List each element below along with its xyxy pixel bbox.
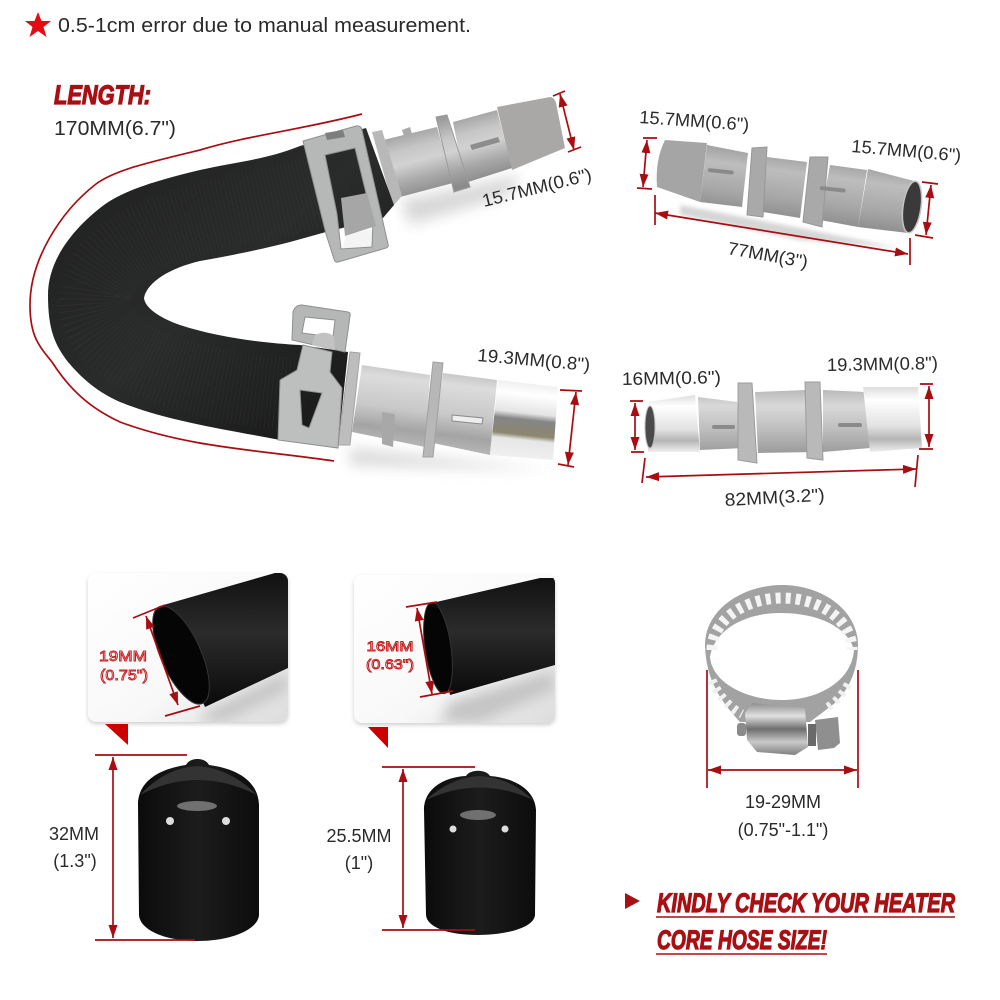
heading: length: LENGTH:	[54, 80, 151, 110]
label: 32mm: 32MM	[49, 824, 99, 844]
dimension: bottom end	[558, 390, 582, 467]
dimension: 82mm connector	[630, 384, 933, 487]
shadow	[680, 205, 900, 248]
hose assembly	[48, 97, 565, 470]
opening	[899, 180, 925, 234]
label: left end size: 15.7MM(0.6")	[639, 107, 750, 135]
label	[99, 648, 148, 684]
label: 19MM	[99, 648, 147, 665]
panel: 16mm cap opening	[354, 575, 555, 725]
label: 25.5mm	[326, 826, 392, 873]
pointer: panel 2	[368, 727, 388, 748]
top clamp	[303, 126, 388, 262]
label: (0.75")	[100, 667, 148, 684]
dimension: large cap height	[95, 755, 195, 940]
bottom clamp nub	[312, 333, 335, 350]
dimension	[406, 602, 453, 697]
label: 16MM	[366, 638, 414, 654]
hose ribs	[94, 190, 320, 395]
icon: arrow	[625, 893, 640, 909]
connector: 77mm	[657, 140, 925, 248]
top clamp tab	[341, 193, 376, 236]
hose clamp	[705, 585, 858, 755]
note text: 0.5-1cm error due to manual measurement.	[58, 14, 471, 37]
label: clamp range	[738, 792, 828, 840]
label: clamp range: 19-29MM	[745, 792, 821, 812]
dimension: 77mm connector	[637, 138, 938, 265]
pointer: panel 1	[105, 724, 128, 745]
black hose	[48, 128, 394, 445]
white gap below top clamp	[342, 229, 375, 250]
label: right end 19.3mm: 19.3MM(0.8")	[827, 353, 938, 375]
opening	[645, 406, 655, 448]
clamp housing	[745, 703, 808, 755]
callout: check hose size	[625, 888, 955, 955]
dimension: top end	[553, 91, 581, 152]
dimension: small cap height	[382, 767, 475, 930]
label: 82mm: 82MM(3.2")	[724, 485, 825, 510]
clamp slots	[712, 598, 852, 650]
label: (0.63")	[366, 656, 414, 672]
label: left end 16mm: 16MM(0.6")	[622, 367, 721, 389]
shadow under fittings	[350, 175, 550, 470]
label: 32mm: (1.3")	[53, 851, 97, 871]
label: 77mm: 77MM(3")	[726, 238, 810, 272]
connector: 82mm	[645, 382, 922, 463]
top fitting	[372, 97, 565, 206]
label: total length: 170MM(6.7")	[54, 118, 176, 140]
label: 32mm	[49, 824, 99, 871]
bottom fitting	[338, 352, 558, 460]
cap: large	[138, 759, 259, 941]
dimension	[133, 605, 200, 716]
panel: 19mm cap opening	[88, 573, 288, 724]
callout text line 2: CORE HOSE SIZE!	[657, 925, 827, 955]
bottom clamp tab	[292, 305, 350, 352]
note: measurement error	[25, 12, 471, 37]
label: top end size: 15.7MM(0.6")	[480, 164, 594, 211]
dimension: clamp range	[707, 670, 858, 788]
top clamp slot	[325, 130, 345, 140]
curve: length measure	[30, 114, 362, 461]
clamp screw	[815, 717, 840, 750]
label: right end size: 15.7MM(0.6")	[851, 136, 962, 166]
bottom clamp	[278, 345, 342, 448]
label: bottom end size: 19.3MM(0.8")	[477, 345, 591, 375]
label: 25.5mm: 25.5MM	[326, 826, 392, 846]
icon: red star	[25, 12, 51, 37]
label	[366, 638, 414, 672]
cap: small	[424, 771, 536, 935]
clamp band	[705, 585, 858, 722]
label: clamp range: (0.75"-1.1")	[738, 820, 828, 840]
label: 25.5mm: (1")	[345, 853, 373, 873]
